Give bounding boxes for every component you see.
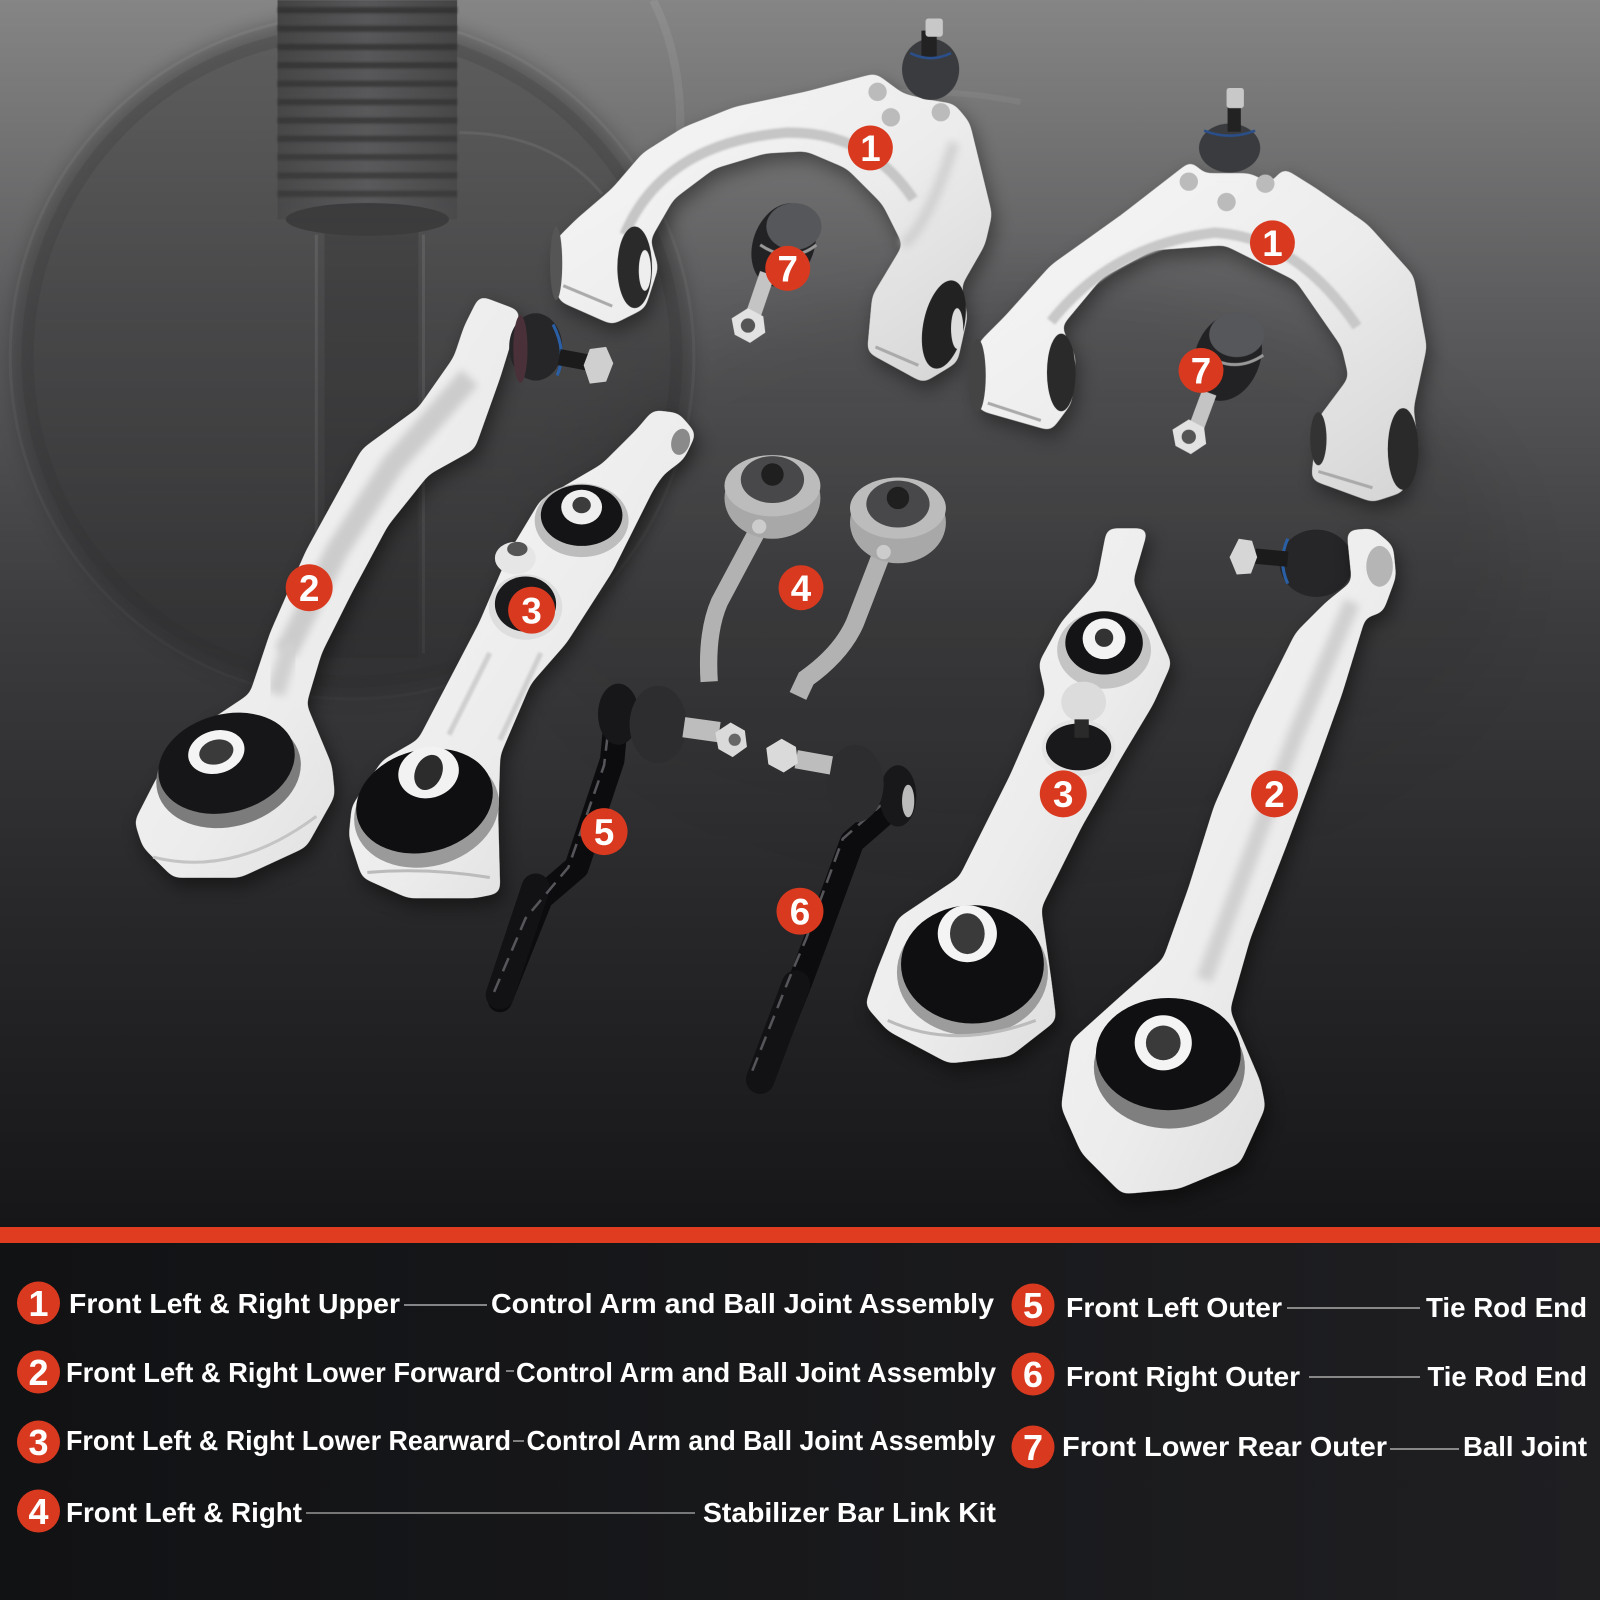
- part: lower rearward arm, left: [341, 410, 700, 906]
- legend row 1: [17, 1282, 994, 1324]
- legend row 2: Control Arm and Ball Joint Assembly: [516, 1357, 996, 1388]
- part: tie rod end, left: [493, 684, 747, 1000]
- legend: right column: [1012, 1284, 1587, 1468]
- legend row 2: Front Left & Right Lower Forward: [66, 1357, 501, 1388]
- legend row 7: Ball Joint: [1463, 1431, 1587, 1462]
- legend: left column: [17, 1282, 996, 1532]
- legend row 1: Front Left & Right Upper: [69, 1288, 400, 1319]
- legend row 6: 6: [1023, 1354, 1043, 1395]
- legend row 4: Front Left & Right: [66, 1497, 302, 1528]
- legend row 6: Front Right Outer: [1066, 1361, 1300, 1392]
- number badges on parts: [286, 126, 1298, 935]
- background photo: strut and wheel well: [11, 0, 1165, 662]
- legend row 1: Control Arm and Ball Joint Assembly: [491, 1288, 994, 1319]
- legend row 3: Control Arm and Ball Joint Assembly: [526, 1425, 996, 1456]
- legend row 3: Front Left & Right Lower Rearward: [66, 1425, 511, 1456]
- part: ball joint left: [732, 194, 827, 343]
- legend row 5: Front Left Outer: [1066, 1292, 1282, 1323]
- parts photo group: [135, 18, 1431, 1202]
- number badges on parts: 4: [791, 568, 812, 609]
- number badges on parts: 7: [778, 249, 798, 290]
- legend row 2: 2: [28, 1352, 49, 1393]
- part: ball joint right: [1172, 304, 1274, 454]
- legend row 7: Front Lower Rear Outer: [1062, 1431, 1387, 1462]
- legend row 5: Tie Rod End: [1426, 1292, 1587, 1323]
- legend row 6: Tie Rod End: [1428, 1361, 1587, 1392]
- part: lower forward arm, right: [1061, 529, 1400, 1202]
- number badges on parts: 5: [594, 812, 614, 853]
- legend row 2: [17, 1350, 996, 1394]
- part: upper control arm, left: [550, 18, 996, 391]
- number badges on parts: 2: [299, 568, 319, 609]
- legend row 5: [1012, 1284, 1587, 1326]
- legend row 4: Stabilizer Bar Link Kit: [703, 1497, 996, 1528]
- part: stabilizer bar link, left: [709, 455, 820, 682]
- part: tie rod end, right: [750, 739, 916, 1082]
- legend row 7: 7: [1023, 1427, 1043, 1468]
- legend row 1: 1: [28, 1283, 49, 1324]
- number badges on parts: 7: [1191, 351, 1211, 392]
- legend panel background: [0, 1243, 1600, 1600]
- part: lower forward arm, left: [135, 296, 613, 886]
- background gradient: [0, 0, 1600, 1228]
- legend row 3: [17, 1420, 996, 1464]
- legend row 3: 3: [28, 1422, 49, 1463]
- legend row 6: [1012, 1352, 1587, 1396]
- number badges on parts: 6: [790, 891, 810, 932]
- legend row 4: [17, 1490, 996, 1532]
- number badges on parts: 1: [1262, 223, 1283, 264]
- legend row 4: 4: [28, 1491, 49, 1532]
- red divider bar: [0, 1227, 1600, 1243]
- legend row 5: 5: [1023, 1285, 1043, 1326]
- number badges on parts: 3: [1053, 774, 1073, 815]
- legend row 7: [1012, 1426, 1587, 1468]
- number badges on parts: 3: [521, 590, 542, 631]
- part: upper control arm, right: [969, 88, 1431, 510]
- part: stabilizer bar link, right: [798, 478, 946, 696]
- number badges on parts: 1: [860, 128, 881, 169]
- number badges on parts: 2: [1264, 774, 1285, 815]
- part: lower rearward arm, right: [865, 529, 1176, 1071]
